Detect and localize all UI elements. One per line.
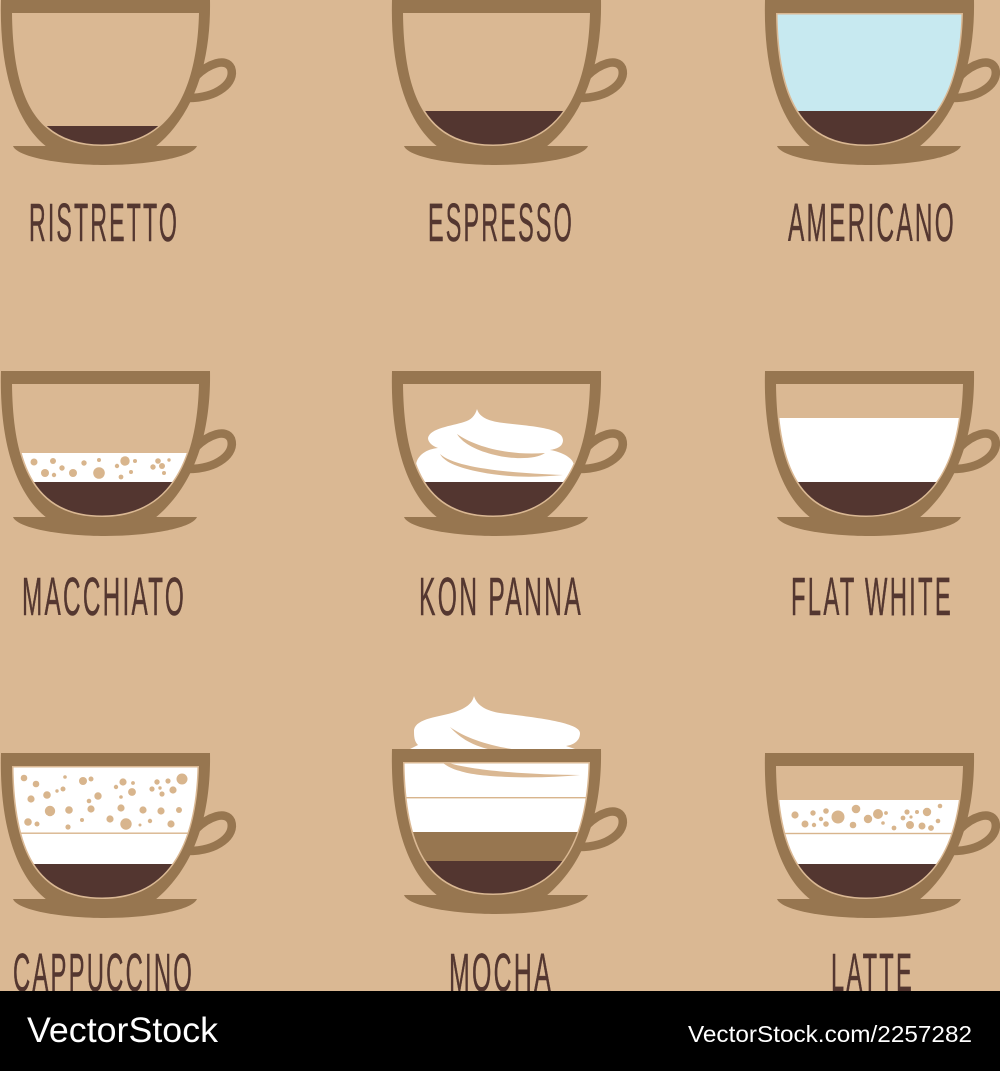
cup: espresso xyxy=(391,0,623,165)
text: KON PANNA xyxy=(419,567,583,627)
cup: macchiato xyxy=(0,371,232,536)
footer bar xyxy=(0,991,1000,1071)
cup: ristretto xyxy=(0,0,232,165)
cup: latte xyxy=(764,753,996,918)
cup: americano xyxy=(764,0,996,165)
text: MOCHA xyxy=(449,943,553,1003)
text: ESPRESSO xyxy=(428,193,574,253)
text: MACCHIATO xyxy=(22,567,186,627)
footer bar: VectorStock xyxy=(27,1011,219,1050)
text: CAPPUCCINO xyxy=(13,943,194,1003)
cup: mocha xyxy=(391,696,623,914)
cup: kon panna xyxy=(391,371,623,536)
cup: cappuccino xyxy=(0,753,232,918)
footer bar: VectorStock.com/2257282 xyxy=(688,1021,972,1047)
cup: flat white xyxy=(764,371,996,536)
text: RISTRETTO xyxy=(29,193,179,253)
